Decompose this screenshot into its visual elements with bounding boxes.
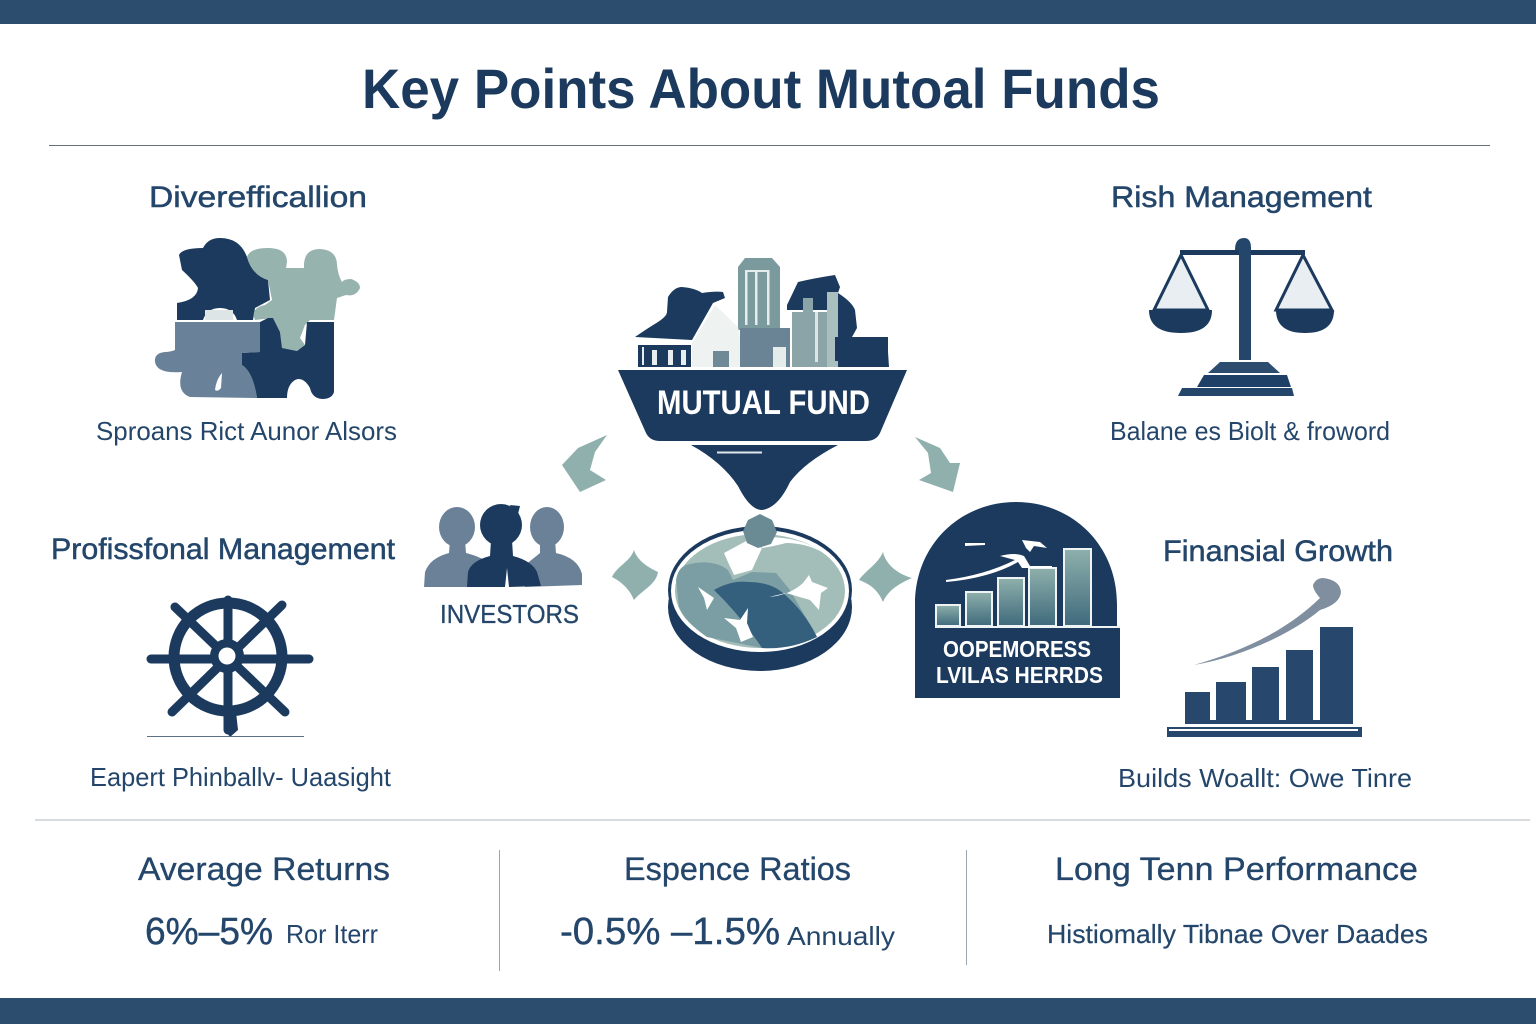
- panel: financial growth: [1118, 535, 1412, 793]
- icon: ship wheel: [147, 600, 309, 737]
- icon: coin basin: [668, 526, 852, 671]
- icon: puzzle: [155, 238, 360, 399]
- heading: Long Tenn Performance: [1055, 851, 1418, 887]
- icon: balance scale: [1149, 238, 1334, 396]
- arrow: left down: [562, 435, 607, 492]
- bar chart: [936, 549, 1091, 626]
- label: investors: INVESTORS: [440, 599, 579, 629]
- label: badge text: OOPEMORESS: [943, 636, 1091, 662]
- panel: risk management: [1110, 181, 1390, 446]
- stat: long term performance: [1047, 851, 1428, 949]
- diagram: mutual fund center: [562, 258, 960, 671]
- icon: top connector: [743, 514, 777, 548]
- heading: diversification: Diverefficallion: [149, 181, 367, 214]
- top bar: [0, 0, 1536, 24]
- heading: financial growth: Finansial Growth: [1163, 535, 1393, 568]
- caption: risk management: Balane es Biolt & froword: [1110, 416, 1390, 446]
- stat: average returns: [138, 851, 390, 953]
- icon with label: investors: [424, 504, 582, 629]
- label: mutual fund: MUTUAL FUND: [657, 384, 870, 422]
- heading: risk management: Rish Management: [1111, 181, 1373, 214]
- heading: Average Returns: [138, 851, 390, 887]
- value: -0.5% –1.5%: [560, 911, 780, 953]
- badge background: [915, 502, 1120, 698]
- panel: professional management: [51, 533, 396, 792]
- arrow: right down: [915, 437, 960, 492]
- icon: city skyline: [635, 258, 889, 367]
- caption: financial growth: Builds Woallt: Owe Tinre: [1118, 763, 1412, 793]
- panel: diversification: [96, 181, 397, 446]
- bottom bar: [0, 998, 1536, 1024]
- icon: funnel: [618, 370, 907, 510]
- icon: growth bar chart: [1167, 578, 1362, 737]
- heading: professional management: Profissfonal Management: [51, 533, 396, 566]
- arrow: right diamond: [859, 552, 912, 602]
- stat: expense ratios: Annually: [787, 921, 895, 951]
- icon: rising arrow: [946, 540, 1052, 582]
- icon: investors group: [424, 504, 582, 587]
- arrow: left diamond: [612, 550, 658, 600]
- value: 6%–5%: [145, 911, 273, 953]
- panel: performance badge: [915, 502, 1120, 698]
- caption: professional management: Eapert Phinballv- Uaasight: [90, 762, 392, 792]
- stat: expense ratios: [560, 851, 895, 953]
- heading: Espence Ratios: [624, 851, 851, 887]
- title: Key Points About Mutoal Funds: [362, 57, 1160, 120]
- value: Histiomally Tibnae Over Daades: [1047, 919, 1428, 949]
- stat: average returns: Ror Iterr: [286, 919, 378, 949]
- panel: performance badge: LVILAS HERRDS: [936, 662, 1103, 688]
- caption: diversification: Sproans Rict Aunor Alsors: [96, 416, 397, 446]
